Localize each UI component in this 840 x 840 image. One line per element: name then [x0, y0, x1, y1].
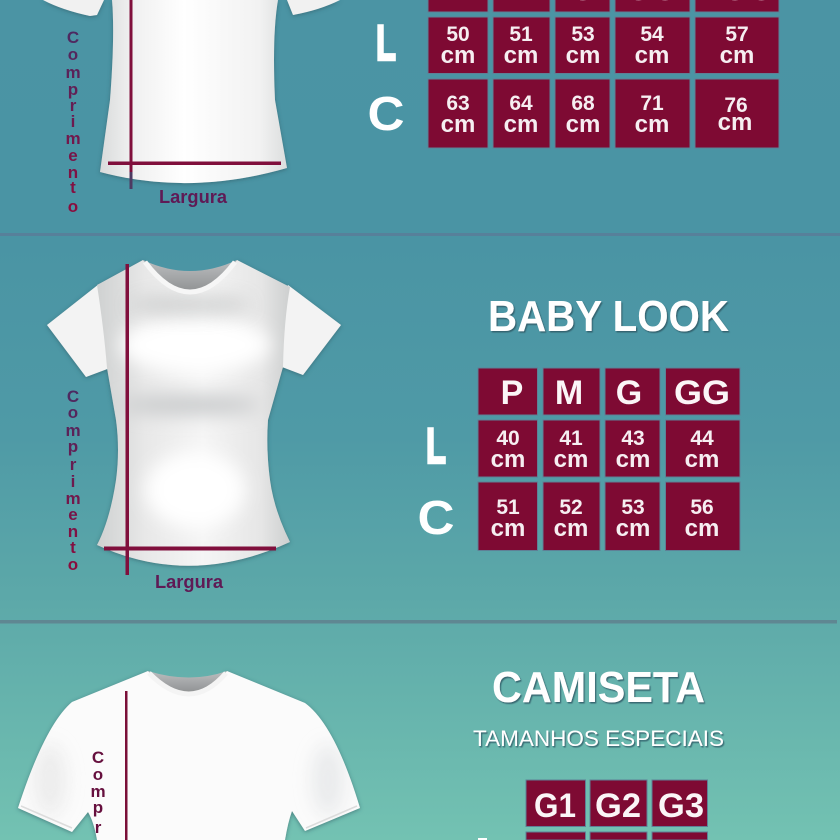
panel: camiseta top section [43, 0, 779, 216]
row L: 50 [446, 23, 470, 46]
label: comprimento: Comprimento [65, 28, 81, 216]
row C: cm [685, 515, 719, 542]
header row: G2 [595, 787, 641, 825]
panel: baby look [47, 260, 740, 592]
row C: 63 [446, 92, 470, 115]
row L: 40 [496, 427, 520, 450]
size table: top [368, 0, 779, 148]
header row [428, 0, 779, 12]
measure lines: comprimento and largura [104, 264, 276, 575]
row C: 56 [690, 496, 714, 519]
header row: G [616, 374, 642, 412]
row L: cm [616, 446, 650, 473]
header row [478, 368, 740, 415]
label: comprimento: Compr [90, 748, 106, 837]
row L: 51 [509, 23, 533, 46]
heading: camiseta: CAMISETA [492, 663, 705, 712]
row L: 57 [725, 23, 749, 46]
panel: camiseta tamanhos especiais [18, 663, 724, 840]
row L: 44 [690, 427, 714, 450]
label: comprimento: Comprimento [65, 387, 81, 574]
row C: cm [504, 111, 538, 138]
row C: 53 [621, 496, 645, 519]
row L: L [376, 15, 396, 71]
row C: 52 [559, 496, 583, 519]
label: largura: Largura [159, 187, 228, 207]
row L [426, 418, 740, 477]
row C: C [368, 88, 404, 141]
row C: cm [554, 515, 588, 542]
row L: cm [491, 446, 525, 473]
icon: white t-shirt cropped at bottom [18, 671, 360, 840]
row L: cm [720, 42, 754, 69]
row C: 68 [571, 92, 595, 115]
row L: L [426, 418, 446, 474]
header row [526, 780, 708, 826]
row L: 53 [571, 23, 595, 46]
row C: 71 [640, 92, 664, 115]
row C: cm [441, 111, 475, 138]
row C: 64 [509, 92, 533, 115]
size table: camiseta especial [478, 780, 708, 840]
header row: GG [674, 374, 730, 412]
row L: cm [441, 42, 475, 69]
measure lines: comprimento and largura [108, 0, 281, 189]
label: largura: Largura [155, 572, 224, 592]
row L: 43 [621, 427, 645, 450]
row C: 76 [724, 94, 748, 117]
icon: white t-shirt cropped at top [43, 0, 340, 183]
row L: cm [685, 446, 719, 473]
row L: cm [554, 446, 588, 473]
header row: P [501, 374, 523, 412]
row L: cm [635, 42, 669, 69]
row L [376, 15, 779, 74]
row L: 54 [640, 23, 664, 46]
row L: cm [504, 42, 538, 69]
measure line: comprimento [125, 691, 128, 840]
row C: 51 [496, 496, 520, 519]
row C: C [418, 492, 454, 545]
size table: baby look [418, 368, 740, 550]
header row: G3 [658, 787, 704, 825]
row L: 41 [559, 427, 583, 450]
row C: cm [718, 109, 752, 136]
header row: M [555, 374, 583, 412]
row L: cm [566, 42, 600, 69]
row C [418, 482, 740, 550]
subheading: tamanhos especiais: TAMANHOS ESPECIAIS [473, 726, 724, 751]
row C: cm [491, 515, 525, 542]
row C: cm [635, 111, 669, 138]
header row: G1 [534, 787, 576, 825]
heading: baby look: BABY LOOK [488, 292, 729, 341]
row C: cm [616, 515, 650, 542]
cropped next row [478, 832, 708, 840]
icon: baby look t-shirt [47, 260, 341, 566]
row C [368, 79, 779, 148]
row C: cm [566, 111, 600, 138]
